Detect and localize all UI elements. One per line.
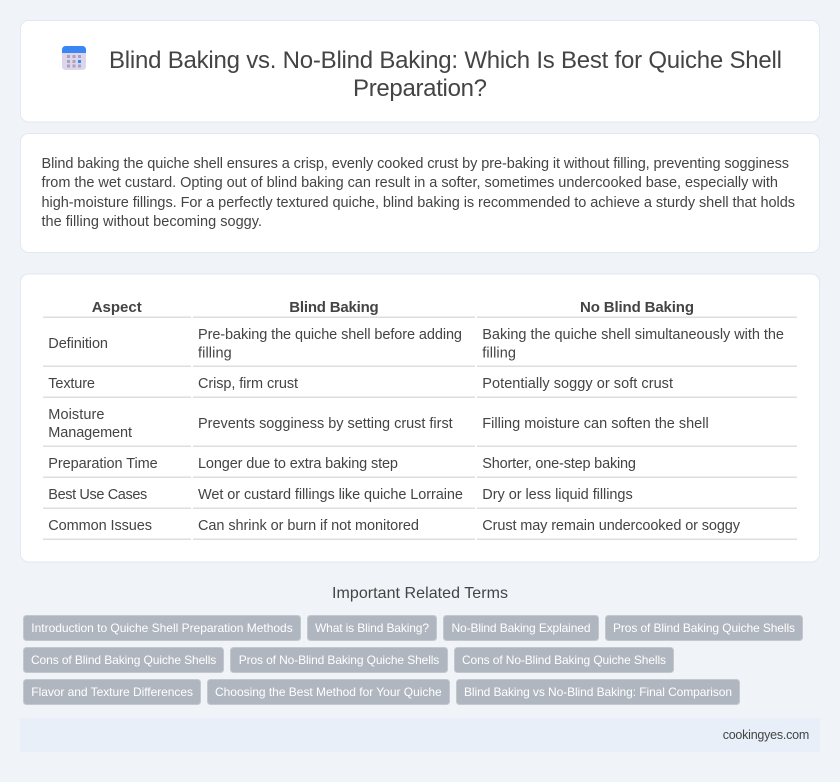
tag: Pros of Blind Baking Quiche Shells bbox=[613, 621, 795, 635]
table card background bbox=[20, 274, 820, 562]
tag: Cons of No-Blind Baking Quiche Shells bbox=[462, 653, 666, 667]
tag: Flavor and Texture Differences bbox=[31, 685, 193, 699]
panel: title card bbox=[20, 20, 820, 122]
row: common issues: Common Issues bbox=[48, 518, 152, 534]
tag: No-Blind Baking Explained bbox=[452, 621, 590, 635]
tag bbox=[606, 616, 802, 640]
tag bbox=[208, 680, 450, 704]
row: definition: Pre-baking the quiche shell before adding bbox=[198, 327, 462, 343]
introduction text: high-moisture fillings. For a perfectly textured quiche, blind baking is recommended to achieve a sturdy shell that holds bbox=[42, 195, 795, 211]
tag: Introduction to Quiche Shell Preparation Methods bbox=[31, 621, 293, 635]
table header row bbox=[92, 299, 694, 316]
row: common issues bbox=[48, 518, 741, 534]
tag bbox=[444, 616, 598, 640]
row: moisture management bbox=[48, 407, 709, 441]
table header row: Aspect bbox=[92, 299, 142, 316]
row: common issues: Crust may remain undercooked or soggy bbox=[482, 518, 741, 534]
row: definition bbox=[48, 327, 784, 362]
row: moisture management: Prevents sogginess by setting crust first bbox=[198, 416, 453, 432]
tag bbox=[24, 680, 200, 704]
row: definition: filling bbox=[482, 346, 516, 362]
row: preparation time: Longer due to extra baking step bbox=[198, 456, 398, 472]
tag bbox=[454, 648, 674, 672]
panel: comparison table bbox=[20, 274, 820, 562]
row: texture bbox=[48, 376, 673, 392]
heading: important related terms: Important Related Terms bbox=[332, 585, 508, 602]
row: definition: filling bbox=[198, 346, 232, 362]
tag: Choosing the Best Method for Your Quiche bbox=[215, 685, 442, 699]
introduction card background bbox=[20, 134, 820, 252]
row: definition: Definition bbox=[48, 336, 108, 352]
row: moisture management: Filling moisture can soften the shell bbox=[482, 416, 709, 432]
row: common issues: Can shrink or burn if not monitored bbox=[198, 518, 419, 534]
tag bbox=[456, 680, 740, 704]
tag bbox=[308, 616, 436, 640]
title card background bbox=[20, 20, 820, 122]
panel: related term tags bbox=[24, 616, 802, 704]
row: best use cases: Wet or custard fillings like quiche Lorraine bbox=[198, 487, 463, 503]
title: Preparation? bbox=[353, 75, 487, 102]
footer source: cookingyes.com bbox=[723, 728, 809, 742]
row: best use cases: Dry or less liquid fillings bbox=[482, 487, 633, 503]
row: preparation time: Shorter, one-step baking bbox=[482, 456, 636, 472]
tag bbox=[24, 648, 224, 672]
table header row: Blind Baking bbox=[289, 299, 379, 316]
introduction text: the filling without becoming soggy. bbox=[42, 214, 262, 230]
row: moisture management: Moisture bbox=[48, 407, 104, 423]
row: best use cases: Best Use Cases bbox=[48, 487, 147, 503]
tag bbox=[230, 648, 448, 672]
row: texture: Texture bbox=[48, 376, 95, 392]
introduction text: from the wet custard. Opting out of blind baking can result in a softer, sometimes undercooked base, especially with bbox=[42, 175, 778, 191]
row: texture: Potentially soggy or soft crust bbox=[482, 376, 673, 392]
title bbox=[109, 47, 782, 102]
tag: Blind Baking vs No-Blind Baking: Final Comparison bbox=[464, 685, 732, 699]
tag bbox=[24, 616, 300, 640]
row: definition: Baking the quiche shell simultaneously with the bbox=[482, 327, 784, 343]
panel: introduction bbox=[20, 134, 820, 252]
tag: Cons of Blind Baking Quiche Shells bbox=[31, 653, 216, 667]
introduction text bbox=[42, 156, 795, 230]
row: moisture management: Management bbox=[48, 425, 132, 441]
title: Blind Baking vs. No-Blind Baking: Which Is Best for Quiche Shell bbox=[109, 47, 782, 74]
row: preparation time bbox=[48, 456, 636, 472]
icon: calendar bbox=[62, 46, 86, 70]
tag: Pros of No-Blind Baking Quiche Shells bbox=[239, 653, 439, 667]
footer bbox=[20, 718, 820, 752]
row: best use cases bbox=[48, 487, 633, 503]
footer bar bbox=[20, 718, 820, 752]
row: texture: Crisp, firm crust bbox=[198, 376, 298, 392]
introduction text: Blind baking the quiche shell ensures a crisp, evenly cooked crust by pre-baking it without filling, preventing sogginess bbox=[42, 156, 789, 172]
row: preparation time: Preparation Time bbox=[48, 456, 158, 472]
table header row: No Blind Baking bbox=[580, 299, 694, 316]
tag: What is Blind Baking? bbox=[315, 621, 429, 635]
